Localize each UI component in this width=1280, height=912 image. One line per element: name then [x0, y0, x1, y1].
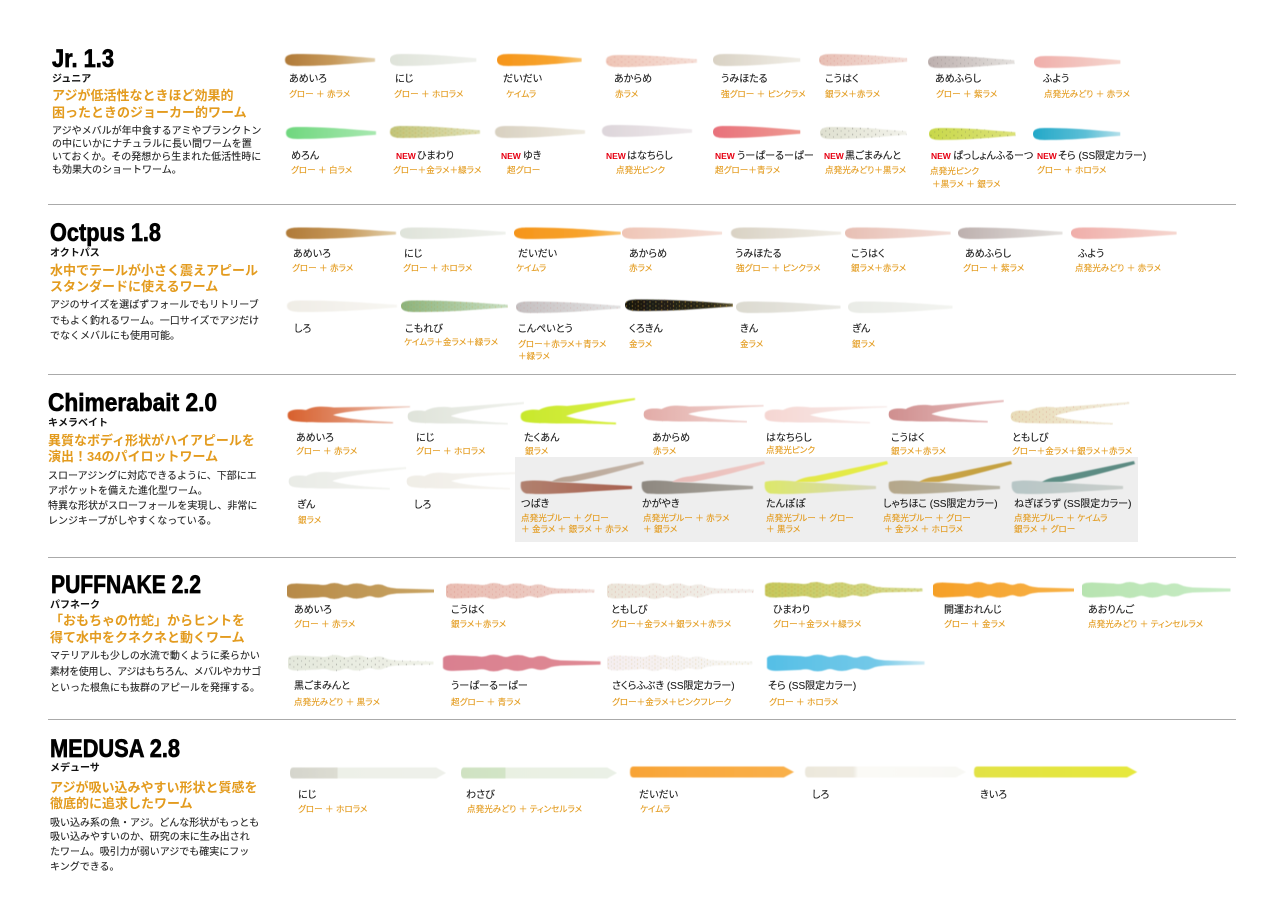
lure: ぎん [289, 467, 406, 525]
lure: あめふらし [928, 56, 1014, 99]
lure: きん: 金ラメ [740, 338, 763, 349]
lure: はなちらし [602, 125, 692, 175]
lure: ぱっしょんふるーつ [929, 128, 1034, 189]
lure: にじ: グロー ＋ ホロラメ [394, 88, 463, 99]
lure: こうはく [845, 228, 951, 273]
lure: そら: グロー ＋ ホロラメ [1037, 164, 1106, 175]
lure: はなちらし: はなちらし [627, 150, 673, 162]
lure: こんぺいとう: こんぺいとう [518, 323, 573, 335]
lure: ひまわり: ひまわり [417, 150, 454, 162]
lure: はなちらし: はなちらし [766, 432, 812, 444]
lure: ともしび: グロー＋金ラメ＋銀ラメ＋赤ラメ [611, 618, 731, 629]
lure: あめいろ [288, 406, 410, 456]
lure: だいだい [497, 54, 582, 99]
lure: にじ: にじ [395, 73, 413, 85]
lure: しろ [805, 766, 966, 801]
panel: PUFFNAKE 2.2 [50, 571, 1230, 707]
lure: うみほたる [713, 54, 806, 99]
lure: うーぱーるーぱー [443, 655, 600, 707]
lure: はなちらし: NEW [606, 151, 627, 161]
lure: あめいろ: あめいろ [294, 604, 332, 616]
lure: あめいろ: グロー ＋ 赤ラメ [294, 618, 355, 629]
lure: あからめ: あからめ [629, 248, 667, 260]
lure: こんぺいとう: グロー＋赤ラメ＋青ラメ [518, 338, 606, 349]
lure: たんぽぽ: 点発光ブルー ＋ グロー [766, 512, 854, 523]
lure: こうはく: 銀ラメ＋赤ラメ [851, 262, 906, 273]
tagline: 得て水中をクネクネと動くワーム [50, 630, 245, 645]
lure: こもれび [401, 300, 508, 347]
lure: うーぱーるーぱー: 超グロー ＋ 青ラメ [451, 696, 521, 707]
tagline: アジが吸い込みやすい形状と質感を [50, 780, 257, 795]
lure: きいろ: きいろ [980, 789, 1007, 801]
lure: こうはく [819, 54, 907, 99]
lure: はなちらし: 点発光ピンク [616, 164, 665, 175]
lure: そら [1033, 128, 1146, 175]
lure: ひまわり: ひまわり [773, 604, 810, 616]
lure: うみほたる: うみほたる [721, 73, 768, 85]
lure: しろ [407, 472, 527, 511]
lure: あおりんご [1082, 582, 1230, 629]
lure: ふよう: 点発光みどり ＋ 赤ラメ [1044, 88, 1130, 99]
lure: あからめ: あからめ [652, 432, 690, 444]
lure: あからめ: 赤ラメ [615, 89, 638, 99]
lure: あめいろ: グロー ＋ 赤ラメ [292, 262, 353, 273]
lure: にじ: にじ [298, 789, 316, 801]
lure: うーぱーるーぱー: NEW [715, 151, 736, 161]
lure: あからめ [622, 228, 722, 273]
lure: しゃちほこ [883, 461, 1012, 534]
lure: はなちらし [765, 406, 887, 455]
lure: そら [767, 655, 924, 707]
title: Jr. 1.3 [52, 45, 114, 73]
lure: しろ: しろ [294, 323, 311, 335]
lure: だいだい: だいだい [518, 248, 558, 260]
lure: かがやき: かがやき [642, 497, 680, 510]
lure: にじ [400, 228, 506, 273]
lure: そら: そら (SS限定カラー) [1058, 150, 1146, 162]
lure: ぎん: 銀ラメ [852, 338, 875, 349]
lure: めろん: グロー ＋ 白ラメ [291, 164, 352, 175]
lure: こうはく: こうはく [851, 248, 885, 260]
lure: ねぎぼうず: 点発光ブルー ＋ ケイムラ [1014, 512, 1108, 523]
lure: 黒ごまみんと: 黒ごまみんと [294, 679, 350, 692]
lure: ふよう: ふよう [1043, 73, 1069, 85]
lure: あめいろ [287, 583, 434, 629]
lure: ふよう: 点発光みどり ＋ 赤ラメ [1075, 262, 1161, 273]
lure: ねぎぼうず: ねぎぼうず (SS限定カラー) [1014, 497, 1131, 510]
lure: あめふらし: グロー ＋ 紫ラメ [963, 262, 1024, 273]
subtitle: キメラベイト [48, 417, 108, 429]
lure: きん: きん [740, 323, 758, 335]
lure: かがやき: ＋ 銀ラメ [643, 523, 677, 534]
lure: こんぺいとう: ＋緑ラメ [518, 350, 550, 361]
lure: きん [736, 302, 840, 349]
lure: あめいろ: あめいろ [289, 73, 327, 85]
lure: ともしび: ともしび [611, 604, 648, 616]
lure: あめふらし [958, 228, 1062, 273]
lure: にじ [408, 402, 524, 456]
lure: こうはく [889, 400, 1004, 456]
lure: たんぽぽ [765, 461, 888, 534]
lure: こうはく: こうはく [891, 432, 925, 444]
description: 吸い込みやすいのか、研究の末に生み出され [50, 830, 250, 843]
tagline: 徹底的に追求したワーム [50, 796, 193, 811]
lure: にじ: グロー ＋ ホロラメ [403, 262, 472, 273]
lure: あめいろ: あめいろ [296, 432, 334, 444]
lure: ともしび: グロー＋金ラメ＋銀ラメ＋赤ラメ [1012, 445, 1132, 456]
description: アポケットを備えた進化型ワーム。 [48, 484, 208, 497]
lure: あおりんご: あおりんご [1088, 603, 1134, 616]
lure: ひまわり [390, 126, 481, 175]
description: レンジキープがしやすくなっている。 [48, 514, 217, 527]
description: スローアジングに対応できるように、下部にエ [48, 469, 257, 482]
description: 素材を使用し、アジはもちろん、メバルやカサゴ [50, 665, 261, 678]
lure: ねぎぼうず: 銀ラメ ＋ グロー [1014, 523, 1075, 534]
lure: だいだい: ケイムラ [640, 804, 670, 814]
lure: ひまわり: NEW [396, 151, 417, 161]
lure: あからめ [606, 55, 697, 99]
lure: あからめ [644, 405, 764, 456]
lure: きいろ [974, 766, 1137, 801]
lure: にじ: グロー ＋ ホロラメ [298, 803, 367, 814]
lure: あからめ: あからめ [614, 73, 652, 85]
lure: うーぱーるーぱー: 超グロー＋青ラメ [715, 164, 780, 175]
lure: にじ [290, 768, 446, 814]
lure: たくあん [521, 398, 635, 456]
lure: はなちらし: 点発光ピンク [766, 444, 815, 455]
lure: ひまわり [765, 582, 922, 629]
tagline: 困ったときのジョーカー的ワーム [52, 105, 247, 120]
lure: ねぎぼうず [1012, 461, 1135, 534]
lure: つばき: ＋ 金ラメ ＋ 銀ラメ ＋ 赤ラメ [521, 523, 629, 534]
description: 特異な形状がスローフォールを実現し、非常に [48, 499, 257, 512]
panel: MEDUSA 2.8 [50, 735, 1137, 873]
description: でもよく釣れるワーム。一口サイズでアジだけ [50, 314, 259, 327]
lure: 黒ごまみんと: 点発光みどり＋黒ラメ [825, 164, 906, 175]
lure: ぎん [848, 302, 952, 349]
lure: ふよう [1034, 56, 1130, 99]
description: といった根魚にも抜群のアピールを発揮する。 [50, 681, 260, 694]
tagline: 「おもちゃの竹蛇」からヒントを [50, 613, 245, 628]
lure: たんぽぽ: ＋ 黒ラメ [766, 524, 800, 534]
lure: こうはく: 銀ラメ＋赤ラメ [825, 88, 880, 99]
lure: ゆき [495, 126, 585, 175]
lure: ひまわり: グロー＋金ラメ＋緑ラメ [393, 164, 481, 175]
lure: だいだい: だいだい [639, 789, 679, 801]
lure: ぎん: ぎん [852, 322, 871, 335]
tagline: スタンダードに使えるワーム [50, 279, 218, 294]
lure: 黒ごまみんと: 黒ごまみんと [845, 149, 901, 162]
lure: くろきん [625, 300, 733, 349]
description: でなくメバルにも使用可能。 [50, 329, 180, 342]
lure: こんぺいとう [516, 302, 620, 361]
lure: しゃちほこ: 点発光ブルー ＋ グロー [883, 512, 971, 523]
lure: しろ: しろ [414, 499, 431, 511]
lure: 開運おれんじ: グロー ＋ 金ラメ [944, 618, 1005, 629]
title: Chimerabait 2.0 [48, 389, 217, 417]
lure: うみほたる [731, 228, 841, 273]
lure: かがやき [642, 461, 765, 534]
lure: うみほたる: 強グロー ＋ ピンクラメ [736, 262, 821, 273]
subtitle: オクトパス [50, 247, 100, 259]
lure: ともしび [607, 583, 754, 629]
lure: にじ: グロー ＋ ホロラメ [416, 445, 485, 456]
lure: しろ [287, 300, 397, 335]
lure: めろん [286, 127, 376, 175]
lure: ぱっしょんふるーつ: NEW [931, 151, 952, 161]
lure: 黒ごまみんと: NEW [824, 151, 845, 161]
title: Octpus 1.8 [50, 219, 161, 247]
lure: あからめ: 赤ラメ [629, 263, 652, 273]
lure: あめふらし: あめふらし [935, 73, 981, 85]
lure: ぱっしょんふるーつ: ＋黒ラメ ＋ 銀ラメ [932, 178, 1001, 189]
lure: くろきん: 金ラメ [629, 338, 652, 349]
title: MEDUSA 2.8 [50, 735, 180, 763]
lure: ぱっしょんふるーつ: ぱっしょんふるーつ [953, 150, 1034, 162]
lure: こうはく [446, 583, 594, 629]
lure: あからめ: 赤ラメ [653, 446, 676, 456]
lure: にじ: にじ [416, 432, 434, 444]
lure: あめいろ: あめいろ [293, 248, 331, 260]
lure: つばき: つばき [521, 498, 549, 510]
lure: うみほたる: 強グロー ＋ ピンクラメ [721, 88, 806, 99]
lure: こうはく: こうはく [825, 73, 859, 85]
lure: ぎん: 銀ラメ [298, 514, 321, 525]
lure: さくらふぶき [607, 655, 752, 707]
lure: つばき [521, 461, 644, 534]
panel: Jr. 1.3 [52, 45, 1146, 189]
lure: わさび [461, 768, 617, 814]
lure: だいだい: だいだい [503, 73, 543, 85]
lure: めろん: めろん [291, 150, 319, 162]
description: 吸い込み系の魚・アジ。どんな形状がもっとも [50, 816, 259, 829]
lure: たくあん: たくあん [524, 432, 560, 444]
lure: こもれび: こもれび [405, 323, 443, 335]
description: キングできる。 [50, 860, 120, 873]
lure: うみほたる: うみほたる [735, 248, 782, 260]
lure: そら: グロー ＋ ホロラメ [769, 696, 838, 707]
lure: こうはく: こうはく [451, 604, 485, 616]
lure: こうはく: 銀ラメ＋赤ラメ [891, 445, 946, 456]
panel: Chimerabait 2.0 [48, 389, 1138, 542]
lure: だいだい: ケイムラ [506, 89, 536, 99]
lure: 開運おれんじ [933, 582, 1074, 629]
lure: ふよう: ふよう [1078, 248, 1104, 260]
lure: くろきん: くろきん [629, 323, 663, 335]
lure: うーぱーるーぱー [713, 126, 814, 175]
lure: あめふらし: グロー ＋ 紫ラメ [936, 88, 997, 99]
tagline: 水中でテールが小さく震えアピール [50, 263, 258, 278]
lure: ひまわり: グロー＋金ラメ＋緑ラメ [773, 618, 861, 629]
lure: わさび: わさび [466, 789, 495, 801]
lure: あおりんご: 点発光みどり ＋ ティンセルラメ [1088, 618, 1203, 629]
lure: しろ: しろ [812, 789, 829, 801]
description: アジやメバルが年中食するアミやプランクトン [52, 124, 261, 137]
lure: 黒ごまみんと: 点発光みどり ＋ 黒ラメ [294, 696, 380, 707]
limited colours panel [515, 457, 1138, 542]
lure: かがやき: 点発光ブルー ＋ 赤ラメ [643, 512, 729, 523]
title: PUFFNAKE 2.2 [51, 571, 201, 599]
lure: あめいろ: グロー ＋ 赤ラメ [296, 445, 357, 456]
lure: ゆき: ゆき [523, 150, 541, 162]
lure: ぎん: ぎん [297, 498, 316, 511]
panel: Octpus 1.8 [50, 219, 1177, 361]
tagline: アジが低活性なときほど効果的 [52, 88, 233, 103]
lure: ぱっしょんふるーつ: 点発光ピンク [930, 165, 979, 176]
subtitle: ジュニア [52, 73, 91, 85]
description: いておくか。その発想から生まれた低活性時に [52, 150, 261, 163]
lure: にじ: にじ [404, 248, 422, 260]
lure: そら: NEW [1037, 151, 1058, 161]
lure: あめいろ [286, 228, 396, 273]
tagline: 演出！34のパイロットワーム [48, 449, 218, 464]
lure: さくらふぶき: グロー＋金ラメ＋ピンクフレーク [612, 696, 731, 707]
lure: だいだい [514, 228, 621, 273]
description: マテリアルも少しの水流で動くように柔らかい [50, 649, 260, 662]
lure: しゃちほこ: ＋ 金ラメ ＋ ホロラメ [884, 523, 963, 534]
lure: そら: そら (SS限定カラー) [768, 680, 856, 692]
lure: つばき: 点発光ブルー ＋ グロー [521, 512, 609, 523]
lure: たくあん: 銀ラメ [525, 445, 548, 456]
lure: だいだい: ケイムラ [516, 263, 546, 273]
lure: 黒ごまみんと [820, 127, 906, 175]
description: アジのサイズを選ばずフォールでもリトリーブ [50, 298, 259, 311]
lure: にじ [390, 54, 476, 99]
subtitle: パフネーク [50, 599, 100, 611]
lure: こもれび: ケイムラ＋金ラメ＋緑ラメ [404, 336, 498, 347]
lure: しゃちほこ: しゃちほこ (SS限定カラー) [883, 498, 998, 510]
lure: あめいろ [285, 54, 375, 99]
subtitle: メデューサ [50, 761, 100, 774]
lure: こうはく: 銀ラメ＋赤ラメ [451, 618, 506, 629]
lure: ゆき: 超グロー [507, 164, 540, 175]
description: も効果大のショートワーム。 [52, 163, 182, 176]
lure: わさび: 点発光みどり ＋ ティンセルラメ [467, 803, 582, 814]
description: たワーム。吸引力が弱いアジでも確実にフッ [50, 845, 249, 858]
lure: たんぽぽ: たんぽぽ [766, 498, 806, 510]
lure: ふよう [1071, 228, 1177, 273]
lure: ともしび: ともしび [1012, 432, 1049, 444]
lure: 黒ごまみんと [288, 655, 434, 707]
tagline: 異質なボディ形状がハイアピールを [48, 433, 255, 448]
lure: あめいろ: グロー ＋ 赤ラメ [289, 88, 350, 99]
lure: だいだい [630, 766, 794, 814]
lure: ともしび [1011, 402, 1132, 456]
lure: さくらふぶき: さくらふぶき (SS限定カラー) [612, 680, 735, 692]
lure: うーぱーるーぱー: うーぱーるーぱー [737, 150, 814, 162]
description: の中にいかにナチュラルに長い間ワームを置 [52, 137, 252, 150]
lure: ゆき: NEW [501, 151, 522, 161]
lure: あめふらし: あめふらし [965, 248, 1011, 260]
lure: うーぱーるーぱー: うーぱーるーぱー [451, 680, 528, 692]
lure: 開運おれんじ: 開運おれんじ [944, 604, 1002, 616]
